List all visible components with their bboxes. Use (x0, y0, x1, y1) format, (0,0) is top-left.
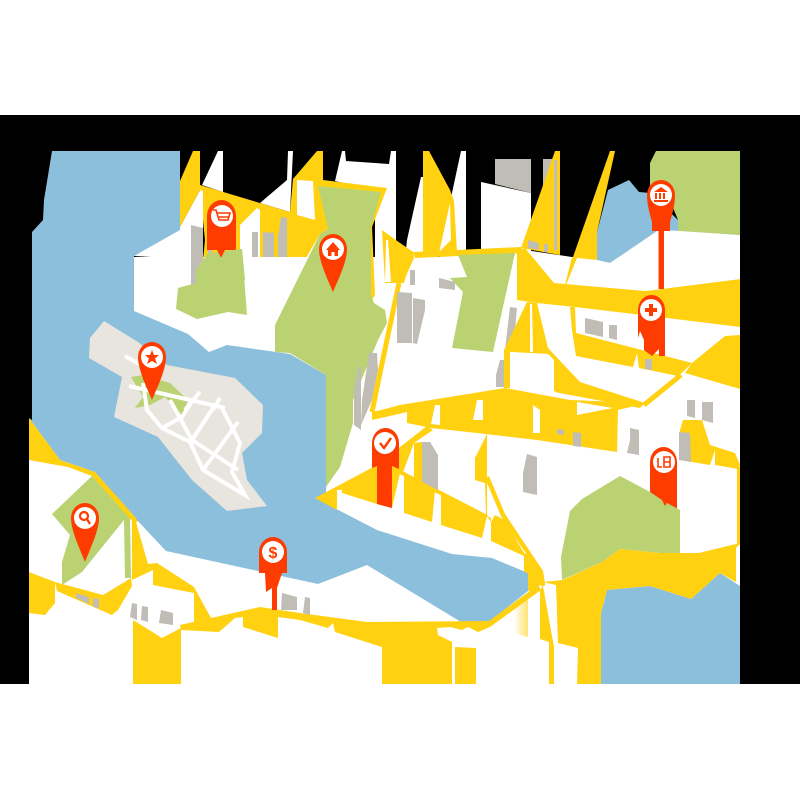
northeast park (650, 151, 740, 235)
icon: document (658, 457, 670, 467)
southwest park (52, 476, 131, 585)
icon: cart (213, 210, 230, 220)
southeast lake (601, 573, 740, 684)
grey buildings behind the northern blocks (495, 159, 557, 245)
large central park (275, 186, 387, 487)
yellow southern road (180, 585, 541, 684)
pin: shopping cart (196, 200, 245, 280)
icon: star (145, 350, 159, 364)
pin: check mark (372, 428, 399, 508)
pin: search (71, 503, 99, 562)
pin: bank (647, 180, 675, 289)
grey buildings by central park (354, 353, 378, 430)
pin: dollar (259, 537, 287, 610)
yellow arrow road and lots (315, 426, 554, 684)
pin: medical cross (638, 295, 665, 356)
northeast pond (597, 180, 678, 263)
grey buildings in northern central block (397, 270, 527, 387)
icon: magnifier (80, 512, 90, 524)
icon: dollar sign: $ (269, 545, 278, 562)
yellow southeastern band (543, 543, 740, 684)
yellow eastern roads and blocks (504, 302, 740, 408)
main river (29, 151, 528, 622)
icon: house (326, 242, 340, 256)
yellow road around central park (372, 230, 413, 412)
island (89, 321, 267, 511)
pin: favourite star (138, 342, 166, 400)
land base (29, 151, 740, 684)
grey buildings by cart pin (191, 217, 287, 290)
icon: check (380, 438, 391, 448)
yellow northern road and blocks (398, 151, 740, 327)
northern central park (450, 253, 515, 352)
island street grid (125, 356, 245, 495)
pin: home (319, 234, 347, 292)
icon: bank building (654, 187, 668, 202)
southeastern park (561, 476, 680, 580)
eastern block grey buildings (627, 400, 713, 455)
yellow eastern lot (679, 420, 740, 545)
yellow southwest roads (29, 418, 211, 684)
yellow northwest roads (180, 151, 387, 300)
pin: document (640, 447, 680, 530)
yellow central crossing band (372, 388, 647, 452)
island park (131, 375, 188, 415)
icon: plus (645, 304, 657, 316)
black map backdrop (0, 115, 800, 684)
northwest park (176, 249, 247, 319)
